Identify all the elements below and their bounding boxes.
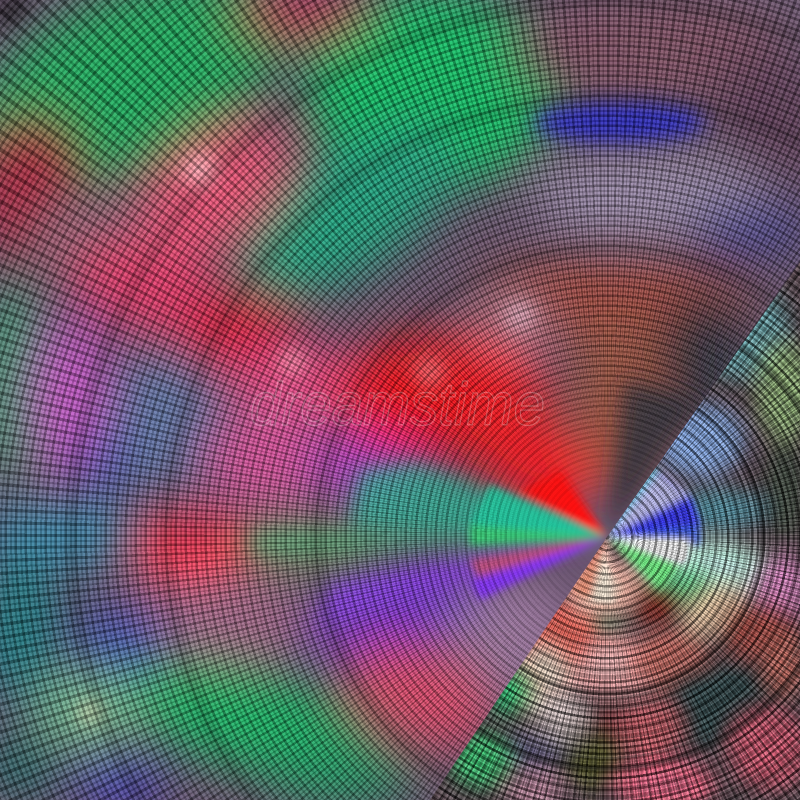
wedge rings and watermark [251, 345, 800, 772]
wedge plaid texture [430, 263, 800, 800]
wedge dark ring bands [476, 345, 800, 772]
near-centre rays [470, 470, 607, 600]
bright lower-right wedge colours [420, 250, 800, 800]
watermark: dreamstime [250, 371, 545, 438]
highlights and dark corner [0, 0, 705, 722]
